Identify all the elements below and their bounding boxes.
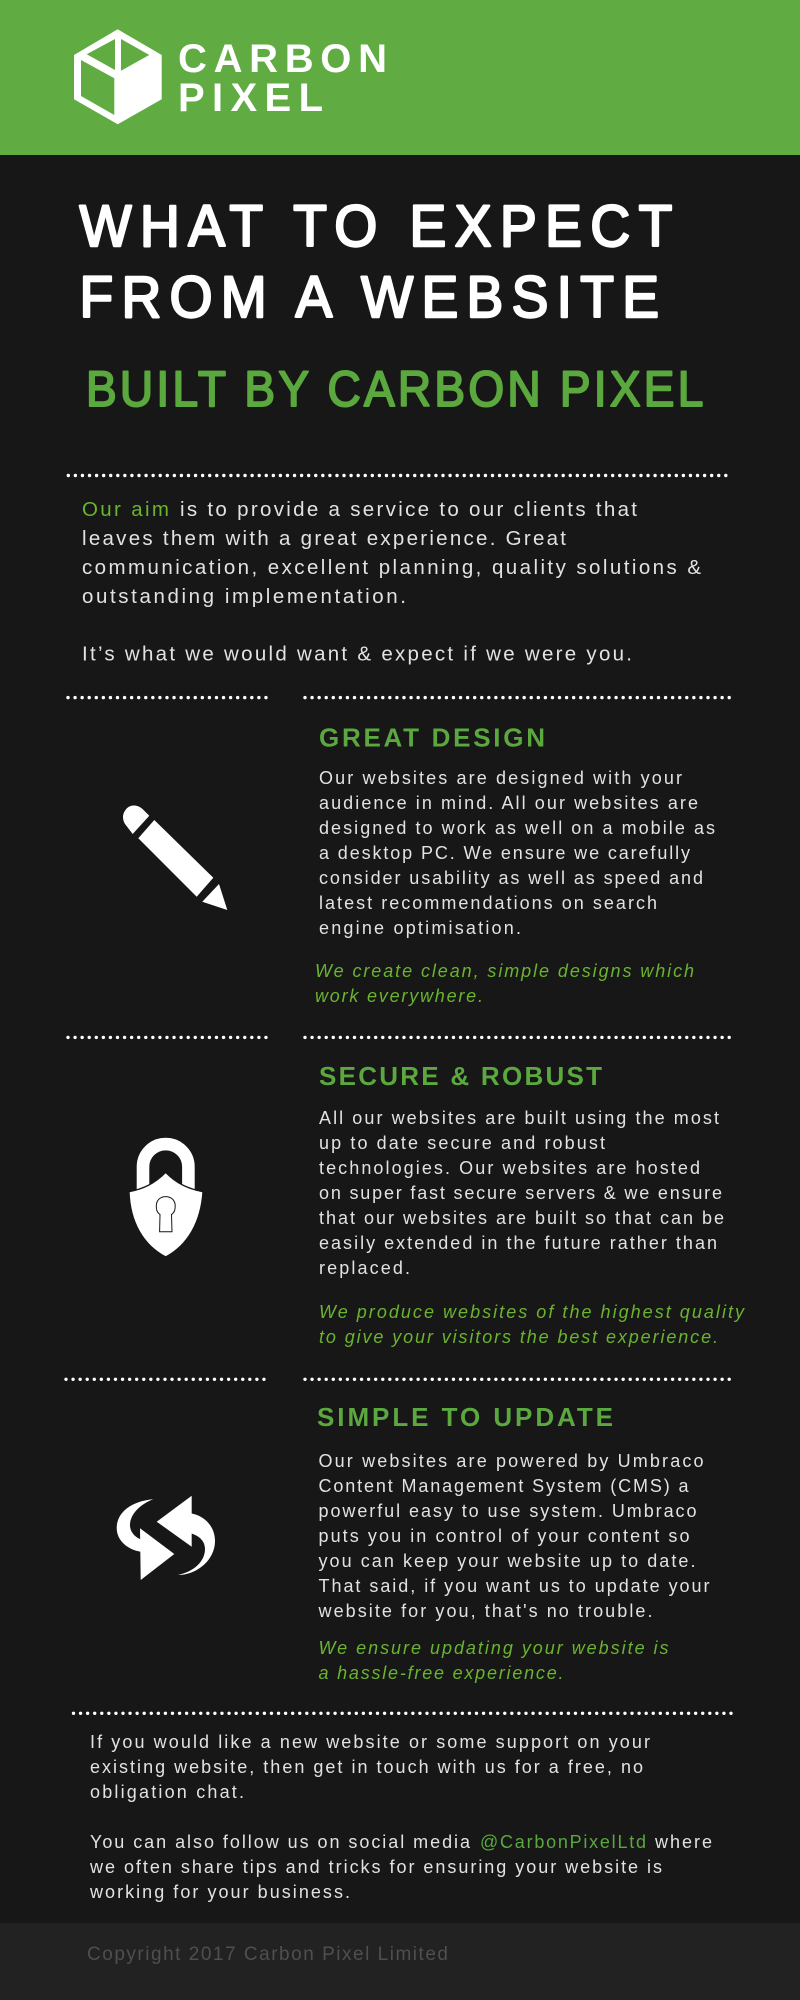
intro text: Our aim bbox=[82, 498, 169, 521]
callout: secure and robust: to give your visitors the best experience. bbox=[319, 1327, 718, 1347]
footer bar bbox=[0, 1923, 800, 2000]
closing text: @CarbonPixelLtd bbox=[480, 1832, 646, 1852]
body text: secure and robust: on super fast secure servers & we ensure bbox=[319, 1183, 722, 1203]
logo wordmark: CARBON bbox=[178, 37, 387, 81]
callout: great design bbox=[315, 961, 694, 1006]
callout: secure and robust bbox=[319, 1302, 745, 1347]
body text: simple to update: website for you, that's no trouble. bbox=[318, 1601, 652, 1621]
icon: refresh arrows bbox=[117, 1496, 215, 1580]
body text: simple to update: puts you in control of your content so bbox=[318, 1526, 690, 1546]
body text: simple to update: you can keep your website up to date. bbox=[318, 1551, 696, 1571]
body text: great design: a desktop PC. We ensure we carefully bbox=[319, 843, 690, 863]
closing text: You can also follow us on social media bbox=[90, 1832, 471, 1852]
callout: simple to update bbox=[318, 1638, 668, 1683]
body text: simple to update: Content Management System (CMS) a bbox=[318, 1476, 689, 1496]
intro text bbox=[82, 498, 701, 666]
callout: simple to update: We ensure updating your website is bbox=[318, 1638, 668, 1658]
callout: great design: We create clean, simple designs which bbox=[315, 961, 694, 981]
body text: secure and robust: All our websites are built using the most bbox=[319, 1108, 719, 1128]
intro text: leaves them with a great experience. Great bbox=[82, 527, 566, 550]
panel: great design bbox=[123, 722, 715, 1006]
body text: secure and robust bbox=[319, 1108, 724, 1278]
icon: pencil bbox=[123, 806, 227, 910]
closing text: working for your business. bbox=[89, 1882, 350, 1902]
callout: simple to update: a hassle-free experience. bbox=[318, 1663, 564, 1683]
body text: great design: Our websites are designed with your bbox=[319, 768, 682, 788]
intro text: It’s what we would want & expect if we were you. bbox=[82, 642, 632, 666]
body text: simple to update: Our websites are powered by Umbraco bbox=[318, 1451, 704, 1471]
intro text: is to provide a service to our clients that bbox=[180, 498, 637, 521]
closing text bbox=[89, 1732, 712, 1902]
closing text: If you would like a new website or some support on your bbox=[90, 1732, 650, 1752]
body text: secure and robust: easily extended in the future rather than bbox=[319, 1233, 717, 1253]
logo wordmark: PIXEL bbox=[178, 76, 323, 120]
title: WHAT TO EXPECT bbox=[80, 194, 672, 258]
closing text: we often share tips and tricks for ensuring your website is bbox=[89, 1857, 662, 1877]
title bbox=[80, 194, 672, 329]
panel: secure and robust bbox=[129, 1061, 745, 1347]
logo wordmark bbox=[178, 37, 387, 120]
body text: great design: engine optimisation. bbox=[319, 918, 521, 938]
body text: secure and robust: replaced. bbox=[319, 1258, 410, 1278]
body text: simple to update: That said, if you want us to update your bbox=[318, 1576, 710, 1596]
intro text: communication, excellent planning, quality solutions & bbox=[82, 556, 701, 579]
body text: great design: audience in mind. All our websites are bbox=[319, 793, 698, 813]
closing text: where bbox=[654, 1832, 712, 1852]
body text: great design bbox=[319, 768, 715, 938]
title: FROM A WEBSITE bbox=[80, 265, 659, 329]
panel: simple to update bbox=[117, 1402, 709, 1683]
subtitle: BUILT BY CARBON PIXEL bbox=[86, 362, 703, 417]
body text: secure and robust: up to date secure and robust bbox=[319, 1133, 605, 1153]
heading: great design: GREAT DESIGN bbox=[319, 722, 545, 752]
intro text: outstanding implementation. bbox=[82, 585, 406, 608]
closing text: existing website, then get in touch with us for a free, no bbox=[90, 1757, 643, 1777]
callout: great design: work everywhere. bbox=[315, 986, 483, 1006]
header band bbox=[0, 0, 800, 155]
icon: padlock shield bbox=[129, 1144, 203, 1257]
body text: great design: designed to work as well on a mobile as bbox=[319, 818, 715, 838]
body text: simple to update bbox=[318, 1451, 710, 1621]
callout: secure and robust: We produce websites of the highest quality bbox=[319, 1302, 745, 1322]
heading: secure and robust: SECURE & ROBUST bbox=[319, 1061, 602, 1091]
body text: great design: latest recommendations on search bbox=[319, 893, 657, 913]
copyright: Copyright 2017 Carbon Pixel Limited bbox=[87, 1944, 448, 1965]
heading: simple to update: SIMPLE TO UPDATE bbox=[317, 1402, 613, 1432]
body text: secure and robust: that our websites are built so that can be bbox=[319, 1208, 724, 1228]
icon: Carbon Pixel cube logo bbox=[74, 29, 162, 124]
body text: great design: consider usability as well as speed and bbox=[319, 868, 703, 888]
body text: simple to update: powerful easy to use system. Umbraco bbox=[318, 1501, 696, 1521]
closing text: obligation chat. bbox=[90, 1782, 244, 1802]
body text: secure and robust: technologies. Our websites are hosted bbox=[319, 1158, 700, 1178]
